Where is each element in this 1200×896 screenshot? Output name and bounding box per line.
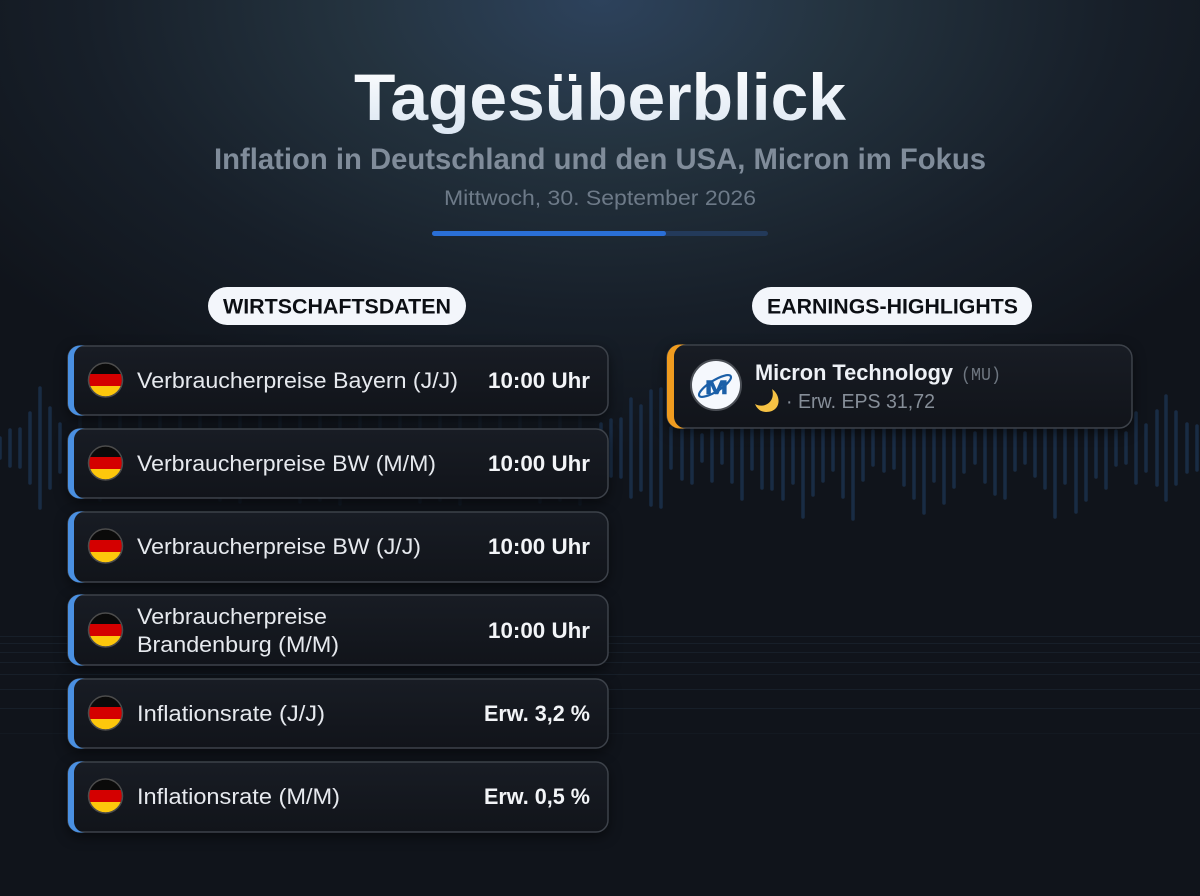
card: Verbraucherpreise Bayern	[68, 346, 608, 416]
icon: Micron logo: M	[705, 378, 728, 399]
horizontal background lines	[0, 636, 1200, 734]
expected EPS: · Erw. EPS 31,72	[786, 391, 935, 413]
card: Inflationsrate J/J: Erw. 3,2 %	[484, 701, 590, 726]
waveform background	[0, 377, 1197, 519]
card: Verbraucherpreise BW J/J: Verbraucherpreise BW (J/J)	[137, 534, 421, 559]
heading pill: Earnings-Highlights	[752, 287, 1032, 325]
icon: Micron logo	[691, 360, 741, 410]
card: Inflationsrate J/J: Inflationsrate (J/J)	[137, 701, 325, 726]
card: Verbraucherpreise Bayern: Verbraucherpreise Bayern (J/J)	[137, 368, 458, 393]
ticker: (MU)	[961, 365, 1001, 386]
heading pill: Wirtschaftsdaten	[208, 287, 466, 325]
card: Micron Technology	[667, 344, 1132, 428]
date: Mittwoch, 30. September 2026	[444, 187, 756, 210]
card: Verbraucherpreise Brandenburg	[68, 594, 608, 666]
card: Verbraucherpreise Brandenburg: 10:00 Uhr	[488, 618, 590, 643]
progress bar	[432, 231, 768, 236]
card: Inflationsrate J/J	[68, 678, 608, 748]
card: Verbraucherpreise BW J/J: 10:00 Uhr	[488, 534, 590, 559]
card: Verbraucherpreise BW J/J	[68, 512, 608, 582]
card: Inflationsrate M/M: Inflationsrate (M/M)	[137, 784, 340, 809]
heading pill: Wirtschaftsdaten: WIRTSCHAFTSDATEN	[223, 296, 451, 318]
company name: Micron Technology	[755, 360, 953, 385]
subtitle: Inflation in Deutschland und den USA, Micron im Fokus	[214, 143, 986, 176]
card: Verbraucherpreise Brandenburg: Verbraucherpreise	[137, 604, 327, 629]
card: Verbraucherpreise BW M/M: 10:00 Uhr	[488, 451, 590, 476]
card: Verbraucherpreise BW M/M	[68, 428, 608, 498]
icon: moon	[755, 389, 779, 412]
card: Inflationsrate M/M	[68, 762, 608, 832]
card: Verbraucherpreise Bayern: 10:00 Uhr	[488, 368, 590, 393]
card: Verbraucherpreise BW M/M: Verbraucherpreise BW (M/M)	[137, 451, 436, 476]
title: Tagesüberblick	[354, 60, 846, 134]
card: Inflationsrate M/M: Erw. 0,5 %	[484, 784, 590, 809]
card: Verbraucherpreise Brandenburg: Brandenburg (M/M)	[137, 632, 339, 657]
heading pill: Earnings-Highlights: EARNINGS-HIGHLIGHTS	[767, 296, 1018, 318]
